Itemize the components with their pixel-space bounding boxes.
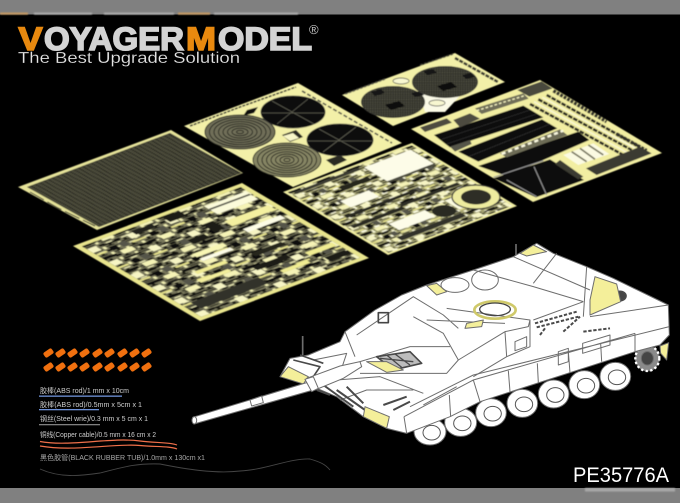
turret rings and hatches [378,270,516,323]
panel: fine mesh sheet [18,130,243,230]
mesh disc right [412,66,478,98]
logo letters OYAGER: OYAGER [44,21,184,57]
panel: two mesh discs sheet [342,53,505,126]
label: ABS rod 0.5mm: 胶棒(ABS rod)/0.5mm x 5cm x 1 [40,400,142,409]
pierced mid strip [500,129,567,157]
label: ABS rod 1mm: 胶棒(ABS rod)/1 mm x 10cm [40,386,129,395]
hull and turret silhouette [280,243,669,433]
lower row of parts [43,362,152,372]
line: ABS rod 1mm [39,396,122,397]
yellow photo-etch parts [280,245,669,428]
gun barrel [192,362,362,424]
label: steel wire: 钢丝(Steel wrie)/0.3 mm x 5 cm x 1 [40,414,148,423]
orange resin parts [43,348,152,372]
materials legend [39,386,330,476]
bright plate [364,150,434,181]
copper cable lower [40,445,177,449]
copper cable upper [40,440,177,445]
black strip 1 [434,106,543,147]
tagline: The Best Upgrade Solution [18,50,240,67]
panel: turret parts sheet [283,143,517,255]
ring part [452,185,500,209]
panel: hull strip sheet [411,80,662,202]
logo letter M: M [186,21,216,57]
panel: large parts sheet [73,183,369,321]
ringed disc left [205,115,275,149]
black strip 3 [478,132,589,176]
engine deck lines [313,335,610,400]
road wheels [414,362,631,445]
line: steel wire [39,424,100,425]
mesh texture [27,133,242,227]
upper row of parts [43,348,152,358]
black disc upper [261,96,325,128]
ringed disc lower [253,143,321,177]
antenna [303,244,516,355]
logo letters ODEL: ODEL [218,21,312,57]
label: black rubber tube: 黑色胶管(BLACK RUBBER TUB)/1.0mm x 130cm x1 [40,453,205,462]
logo letter V: V [18,21,43,57]
top grey band [0,0,680,15]
black strip 4 [493,159,584,197]
mesh disc left [361,86,425,118]
stowage and gear details [293,291,626,410]
registered mark: ® [309,22,319,37]
panel: wheel disc sheet [184,83,402,187]
bottom grey band [0,488,680,503]
drive sprocket [635,346,659,371]
black rubber tube [40,459,330,476]
black disc right [307,124,373,156]
turret roof lines [345,253,668,377]
hull side lines [404,327,669,433]
product code: PE35776A [573,464,669,487]
black strip 2 [458,119,557,162]
logo [18,21,312,57]
tank illustration [192,243,669,445]
line: ABS rod 0.5mm [39,409,99,410]
label: copper cable: 铜线(Copper cable)/0.5 mm x 16 cm x 2 [40,430,156,439]
